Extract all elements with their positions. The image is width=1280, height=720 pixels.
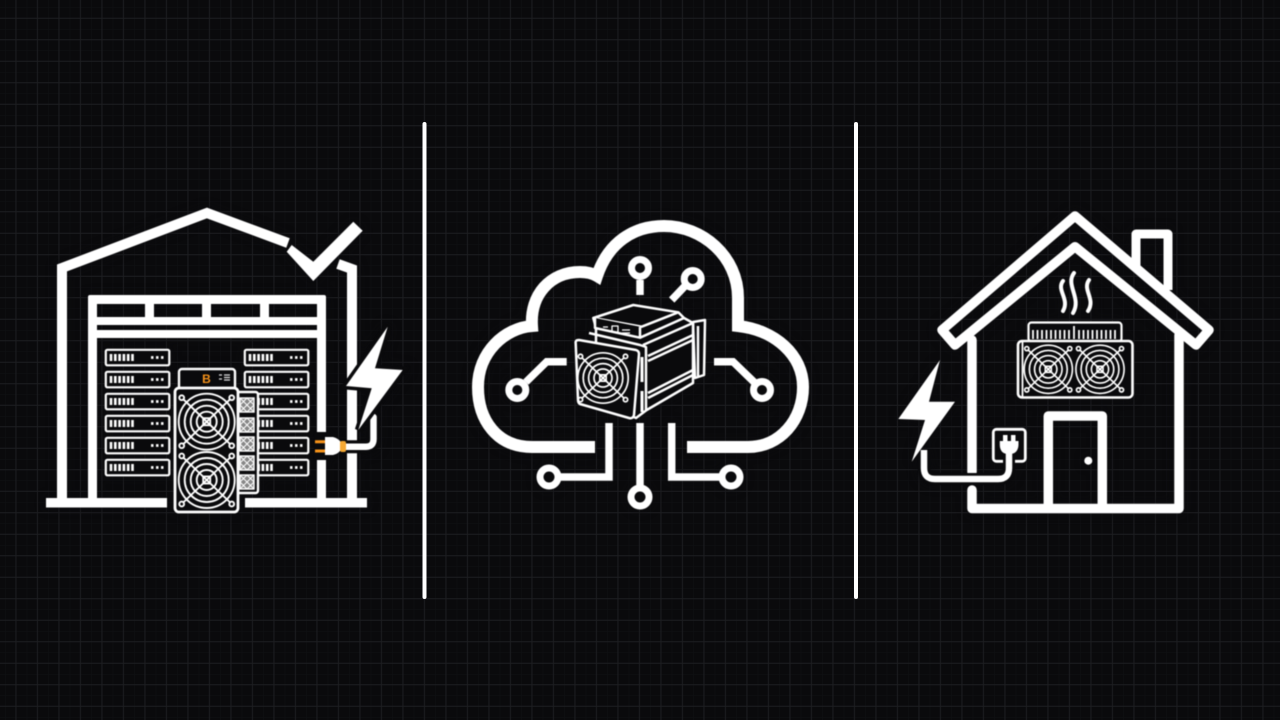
server racks left <box>106 350 169 475</box>
divider right <box>854 122 858 599</box>
wall socket <box>993 429 1025 461</box>
circuit nodes <box>509 260 770 506</box>
isometric miner <box>576 305 705 418</box>
circuit traces <box>526 280 754 486</box>
house walls <box>972 335 1179 508</box>
chimney <box>1136 234 1168 290</box>
lightning bolt <box>346 327 403 430</box>
server racks right <box>245 350 308 475</box>
power cable <box>924 450 1009 479</box>
panel: cloud mining <box>478 226 803 506</box>
cloud outline <box>478 226 803 447</box>
check mark <box>287 222 363 281</box>
power cable <box>342 417 374 447</box>
panel: home mining <box>898 216 1209 508</box>
plug <box>314 432 346 460</box>
divider left <box>422 122 426 599</box>
bitcoin symbol: B <box>202 372 211 386</box>
warehouse roof and walls <box>62 213 352 500</box>
warehouse shutter frame <box>88 295 326 498</box>
plug <box>1000 435 1018 454</box>
roof <box>942 216 1209 345</box>
lightning bolt <box>898 360 955 462</box>
warehouse ground line <box>46 498 367 508</box>
heat waves <box>1061 273 1091 313</box>
wall heater miner <box>1018 322 1132 398</box>
door <box>1048 416 1102 508</box>
miner machine with fans <box>175 369 258 512</box>
panel: warehouse mining <box>46 213 403 512</box>
